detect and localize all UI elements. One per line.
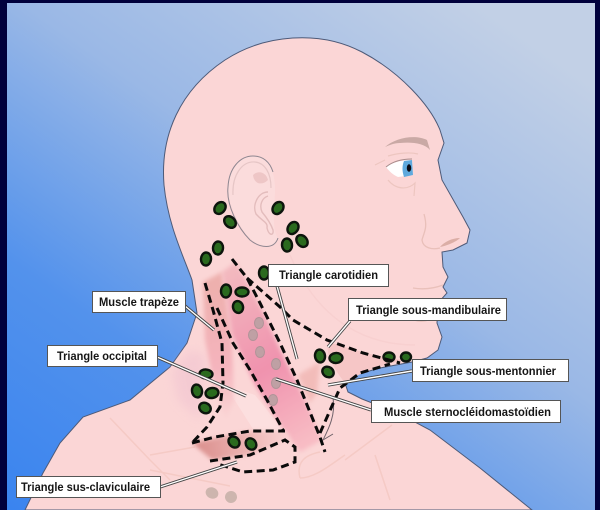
label: Triangle occipital: Triangle occipital (57, 349, 147, 363)
label: Muscle trapèze (92, 292, 214, 330)
label: Muscle sternocléidomastoïdien (276, 379, 560, 422)
triangle sus-claviculaire shading (192, 431, 290, 460)
ear (228, 156, 278, 246)
head and shoulders figure (25, 38, 532, 510)
label: Triangle sus-claviculaire: Triangle sus-claviculaire (21, 480, 150, 494)
label: Triangle sous-mandibulaire (328, 298, 506, 347)
label: Muscle sternocléidomastoïdien: Muscle sternocléidomastoïdien (384, 405, 551, 419)
eye (375, 153, 418, 196)
nose and mouth details (413, 214, 460, 321)
eyebrow (385, 137, 430, 150)
dashed triangle boundaries (192, 259, 400, 472)
body silhouette (25, 38, 532, 510)
chest creases (110, 418, 392, 500)
deep nodes (grey) (204, 318, 280, 505)
muscle: trapèze (203, 272, 234, 420)
label: Triangle occipital (48, 346, 246, 396)
label: Triangle sous-mandibulaire: Triangle sous-mandibulaire (356, 303, 501, 317)
label: Triangle sus-claviculaire (16, 462, 237, 498)
muscle: sternocléidomastoïdien (222, 262, 322, 452)
label: Triangle carotidien: Triangle carotidien (279, 268, 378, 282)
neck shading (225, 385, 283, 440)
lymph nodes (191, 200, 411, 452)
label: Muscle trapèze: Muscle trapèze (99, 295, 179, 309)
jaw shading (290, 255, 415, 345)
label: Triangle carotidien (268, 264, 388, 359)
label: Triangle sous-mentonnier: Triangle sous-mentonnier (420, 364, 556, 378)
shoulder shading (172, 350, 205, 420)
label: Triangle sous-mentonnier (328, 360, 568, 385)
neck front line (323, 398, 334, 440)
